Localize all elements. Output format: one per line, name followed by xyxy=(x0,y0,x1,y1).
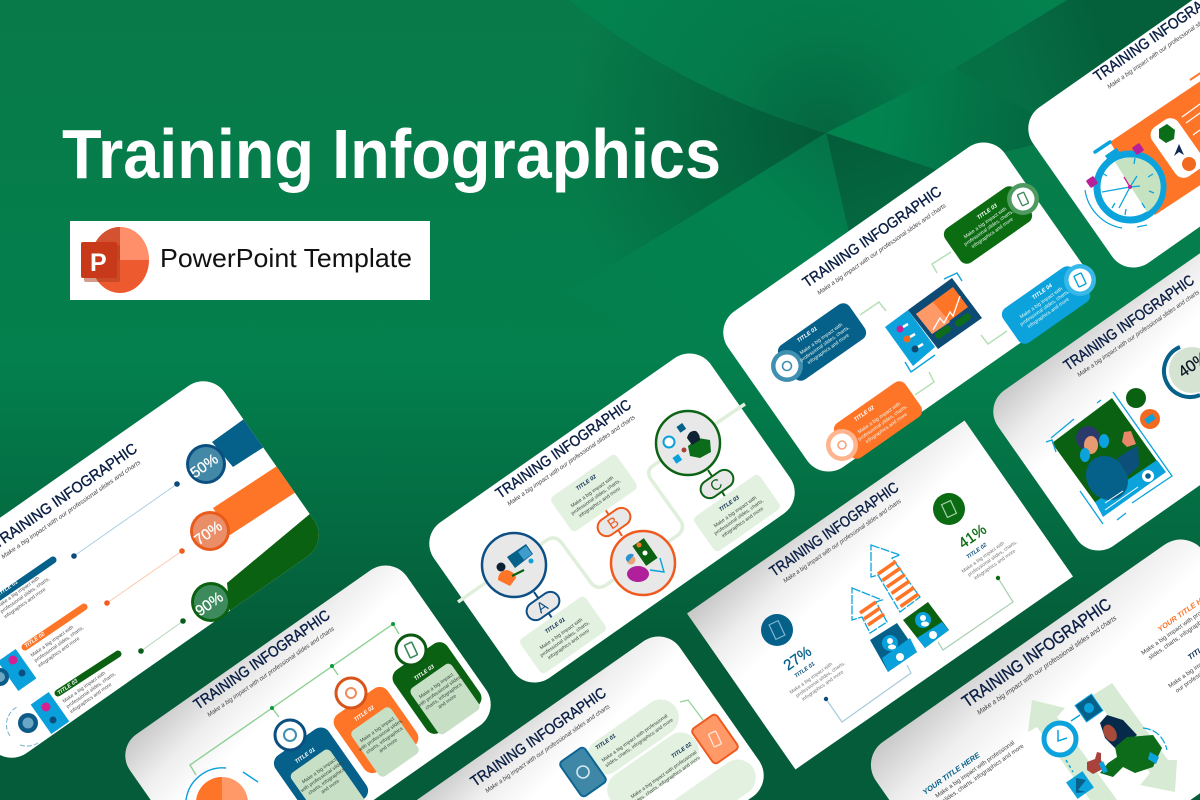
box: title 03: and more xyxy=(437,693,458,710)
callout: title 04: infographics and more xyxy=(1027,297,1071,330)
title 01 block xyxy=(0,560,55,620)
gauge: 70%: 70% xyxy=(191,518,226,549)
text block: left: Make a big impact with professional xyxy=(935,740,1016,800)
title 02 block xyxy=(24,607,89,669)
title 01 block: infographics and more xyxy=(3,587,47,620)
panel: title 03 text: infographics and more xyxy=(721,506,765,539)
slide heading: TRAINING INFOGRAPHIC xyxy=(767,479,902,580)
box: title 03: TITLE 03 xyxy=(413,664,436,682)
panel: thumbs-up slide xyxy=(860,529,1200,800)
icon: PowerPoint logo xyxy=(81,227,149,293)
panel: title 02 text: TITLE 02 xyxy=(575,474,598,492)
slide heading: TRAINING INFOGRAPHIC xyxy=(191,607,333,713)
icon tile: blue xyxy=(559,746,607,798)
panel: percentages slide xyxy=(0,371,335,768)
title 03 block: professional slides, charts, xyxy=(65,671,117,710)
panel: title 01 text: Make a big impact with xyxy=(539,617,584,651)
title 02 block: TITLE 02 xyxy=(24,631,47,650)
callout: title 03: infographics and more xyxy=(971,217,1015,250)
pill: title 02 xyxy=(600,725,706,800)
pill: title 01: slides, charts, infographics and more xyxy=(604,717,675,769)
connector: green xyxy=(138,618,186,654)
connector tree xyxy=(190,622,399,775)
slide subtitle: Make a big impact with our professional slides and charts xyxy=(506,414,637,508)
panel: title 03 text: TITLE 03 xyxy=(718,495,741,513)
arrow: short xyxy=(852,588,887,633)
box: title 02: and more xyxy=(378,737,399,754)
title 02 block: infographics and more xyxy=(37,636,81,669)
panel: title 02 text: professional slides, charts, xyxy=(570,478,622,517)
callout: title 04: professional slides, charts, xyxy=(1019,289,1071,328)
panel: title 03 text: Make a big impact with xyxy=(713,495,758,529)
illustration: person at laptop xyxy=(626,538,664,582)
callout: title 02 xyxy=(826,378,925,462)
box: title 01: and more xyxy=(320,778,341,795)
info capsule xyxy=(1147,114,1200,182)
tile: blue user xyxy=(870,623,917,672)
illustration: person at board xyxy=(496,544,534,586)
box: title 03 xyxy=(389,635,485,738)
panel: title 03 text: professional slides, charts, xyxy=(713,498,765,537)
gauge: 40% xyxy=(1164,347,1200,397)
gauge: 90%: 90% xyxy=(192,589,227,620)
panel: rising arrows slide xyxy=(687,421,1073,769)
connector line xyxy=(680,700,703,720)
callout: title 03: professional slides, charts, xyxy=(963,209,1015,248)
stat: 27%: professional slides, charts, xyxy=(795,660,847,699)
connector: blue xyxy=(71,481,180,559)
gauge: 70% xyxy=(190,511,230,551)
pill: title 01 xyxy=(580,692,686,782)
icon: PowerPoint logo: P xyxy=(90,249,107,277)
illustration: person thumbs up xyxy=(1087,715,1167,777)
step C xyxy=(656,411,782,553)
title 02 block: professional slides, charts, xyxy=(33,625,85,664)
box: title 03: with professional slides, xyxy=(417,674,463,709)
title: Training Infographics xyxy=(62,115,721,193)
slide subtitle: Make a big impact with our professional slides and charts xyxy=(484,703,611,795)
callout: title 04: Make a big impact with xyxy=(1019,286,1064,320)
callout: title 01: Make a big impact with xyxy=(799,322,844,356)
slide heading: TRAINING INFOGRAPHIC xyxy=(468,684,610,790)
badge label: PowerPoint Template xyxy=(160,243,412,273)
slide subtitle: Make a big impact with our professional slides and charts xyxy=(782,498,903,585)
callout: title 03: Make a big impact with xyxy=(963,206,1008,240)
callout: title 03 xyxy=(941,183,1039,267)
title 03 block xyxy=(57,654,121,715)
coloured bars xyxy=(212,420,319,611)
pill: title 01: TITLE 01 xyxy=(595,733,617,752)
panel: title 01 text xyxy=(518,595,608,675)
arrow: tall xyxy=(871,545,920,612)
box: title 01: TITLE 01 xyxy=(294,747,317,765)
stat: 27%: Make a big impact with xyxy=(789,661,834,696)
connector: blue xyxy=(824,665,911,722)
icon: gear tile xyxy=(1075,694,1103,722)
panel: title 03 text xyxy=(692,473,782,553)
connector: green xyxy=(938,576,1013,650)
callout: title 01 xyxy=(771,300,869,384)
gauge: 90% xyxy=(191,582,231,622)
stat: 27%: TITLE 01 xyxy=(794,661,816,680)
icon tile: orange xyxy=(691,713,739,765)
slide subtitle: Make a big impact with our professional slides and charts xyxy=(206,626,336,719)
illustration: orange pie xyxy=(186,768,258,800)
step A xyxy=(482,533,608,675)
title 02 block: Make a big impact with xyxy=(30,624,75,659)
pill: title 02: Make a big impact with professional xyxy=(630,750,698,800)
slide subtitle: Make a big impact with our professional slides and charts xyxy=(0,459,142,561)
callout: title 02: TITLE 02 xyxy=(853,405,876,423)
callout: title 01: professional slides, charts, xyxy=(799,325,851,364)
gauge: 50% xyxy=(186,444,226,484)
title 03 block: Make a big impact with xyxy=(62,670,107,705)
title 03 block: TITLE 03 xyxy=(57,678,80,697)
winding path xyxy=(458,404,745,602)
box: title 01: with professional slides, xyxy=(300,759,346,794)
icon: hourglass tile xyxy=(1066,771,1094,799)
panel: title 02 text xyxy=(549,453,639,533)
box: title 02: charts, infographics xyxy=(365,725,405,756)
arrows: light green xyxy=(1028,683,1177,800)
gauge: 50%: 50% xyxy=(187,451,222,482)
panel: title 01 text: professional slides, charts, xyxy=(539,620,591,659)
slide subtitle: Make a big impact with our professional slides and charts xyxy=(976,615,1118,717)
box: title 02: with professional slides, xyxy=(358,718,404,753)
stat: 41%: infographics and more xyxy=(973,548,1017,582)
orange band xyxy=(1110,70,1200,215)
pill: title 02: TITLE 02 xyxy=(671,741,694,760)
callout: title 03: TITLE 03 xyxy=(976,203,999,221)
stat: 27%: 27% xyxy=(781,643,815,674)
panel: title 01 text: TITLE 01 xyxy=(544,617,567,635)
icon: stopwatch xyxy=(1085,142,1163,228)
step B: B xyxy=(604,513,622,533)
text block: left: YOUR TITLE HERE xyxy=(921,750,982,797)
slide heading: TRAINING INFOGRAPHIC xyxy=(958,595,1115,711)
box: title 01 xyxy=(270,720,372,800)
connector: orange xyxy=(104,548,185,606)
icon: medal and badge lower xyxy=(6,692,69,746)
slide subtitle: Make a big impact with our professional slides and charts xyxy=(816,202,947,297)
box: title 02: TITLE 02 xyxy=(353,705,376,723)
callout: title 04: TITLE 04 xyxy=(1031,283,1054,301)
panel: A B C circles slide xyxy=(419,343,805,693)
box: title 03: charts, infographics xyxy=(424,681,464,712)
stat: 27%: infographics and more xyxy=(801,669,845,703)
pill: title 03 xyxy=(657,752,763,800)
stripes xyxy=(1182,104,1200,135)
callout: title 01: infographics and more xyxy=(807,333,851,366)
panel: title 02 text: Make a big impact with xyxy=(570,475,615,509)
connectors xyxy=(860,252,1007,395)
step C: C xyxy=(707,475,726,495)
box: title 03: Make a big impact xyxy=(418,672,455,700)
callout: title 02: infographics and more xyxy=(865,412,909,445)
panel: title 02 text: infographics and more xyxy=(578,486,622,519)
pill: title 01: Make a big impact with professional xyxy=(601,713,669,764)
panel: four titles slide xyxy=(713,132,1099,482)
step A: A xyxy=(533,597,551,617)
icon: camera badge xyxy=(1140,409,1160,429)
panel: 40% profile slide xyxy=(983,211,1200,561)
illustration: central dashboard xyxy=(885,273,982,372)
PowerPoint template badge xyxy=(70,221,430,300)
slide heading: TRAINING INFOGRAPHIC xyxy=(800,183,945,291)
box: title 01: Make a big impact xyxy=(301,757,338,785)
panel: tiles slide xyxy=(388,626,774,800)
tile: green user xyxy=(903,602,949,648)
title 01 block: professional slides, charts, xyxy=(0,576,51,615)
icon: medal and badge upper xyxy=(0,649,36,691)
box: title 02: Make a big impact xyxy=(359,716,396,744)
stat: 41%: professional slides, charts, xyxy=(967,539,1019,578)
stat: 41%: Make a big impact with xyxy=(961,540,1006,575)
stat: 41% xyxy=(933,493,1022,585)
stat: 41%: TITLE 02 xyxy=(966,542,989,561)
stat: 27% xyxy=(761,614,850,706)
title 03 block: infographics and more xyxy=(69,682,113,715)
slide heading: TRAINING INFOGRAPHIC xyxy=(493,396,635,502)
box: title 01: charts, infographics xyxy=(307,766,347,797)
icon: clock xyxy=(1044,715,1080,772)
box: title 02 xyxy=(330,678,422,779)
illustration: person with clock xyxy=(664,423,711,464)
callout: title 01: TITLE 01 xyxy=(796,326,819,344)
callout: title 02: professional slides, charts, xyxy=(857,404,909,443)
callout: title 02: Make a big impact with xyxy=(857,401,902,435)
panel: stopwatch slide xyxy=(1018,0,1200,278)
step B xyxy=(549,453,675,595)
callout: title 04 xyxy=(999,263,1096,347)
illustration: profile card xyxy=(1046,392,1172,524)
panel: three boxes slide xyxy=(115,555,501,800)
stat: 41%: 41% xyxy=(956,521,990,552)
panel: title 01 text: infographics and more xyxy=(547,628,591,661)
icon: microphone badge xyxy=(1126,388,1146,408)
